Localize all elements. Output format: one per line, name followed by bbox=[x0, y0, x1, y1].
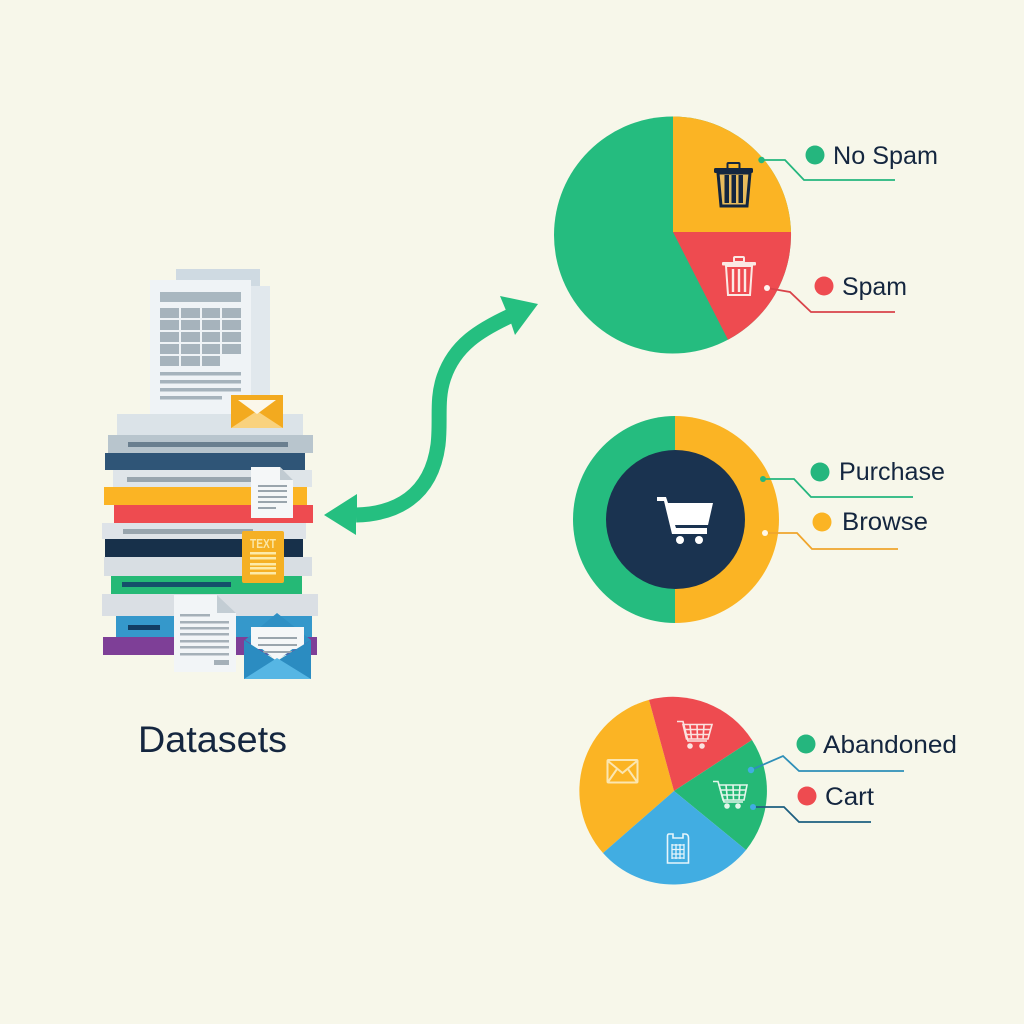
legend: Spam: Spam bbox=[842, 273, 907, 301]
leader: Cart bbox=[750, 804, 871, 822]
icon: TEXT tag bbox=[242, 531, 284, 583]
illustration: stack of datasets bbox=[102, 269, 318, 679]
legend: Cart: Cart bbox=[825, 783, 874, 811]
icon: dark trash can bbox=[714, 163, 753, 206]
book stack bbox=[102, 414, 318, 655]
leader: Spam bbox=[764, 285, 895, 312]
icon: TEXT tag: TEXT bbox=[250, 536, 276, 551]
icon: stacked paper sheets with table bbox=[150, 269, 270, 415]
panel: spam pie chart bbox=[554, 116, 938, 354]
legend: Purchase: Purchase bbox=[839, 458, 945, 486]
slice: red bbox=[649, 697, 752, 791]
icon: envelope outline bbox=[608, 760, 638, 782]
ring: green half bbox=[573, 416, 675, 623]
leader: No Spam bbox=[758, 157, 895, 180]
slice: green bbox=[554, 116, 791, 354]
panel: purchase donut chart bbox=[573, 416, 945, 623]
slice: blue bbox=[603, 791, 746, 885]
leader: Abandoned bbox=[748, 756, 904, 773]
icon: white trash can bbox=[722, 257, 756, 295]
icon: red slice cart bbox=[677, 722, 712, 748]
legend: Abandoned: Abandoned bbox=[823, 731, 957, 759]
leader: Browse bbox=[762, 530, 898, 549]
slice: green bbox=[674, 740, 767, 850]
icon: green slice cart bbox=[713, 782, 747, 808]
icon: yellow envelope bbox=[231, 395, 283, 428]
icon: small document bbox=[251, 467, 293, 518]
panel: four-slice pie chart bbox=[579, 697, 957, 885]
slice: red bbox=[673, 232, 791, 340]
arrow: two-way curved arrow bbox=[324, 296, 538, 535]
icon: blue open envelope bbox=[244, 613, 311, 679]
icon: white shopping cart bbox=[657, 497, 713, 544]
legend: Cart bbox=[798, 783, 874, 811]
slice: yellow bbox=[579, 700, 674, 853]
ring: yellow half bbox=[675, 416, 779, 623]
legend: No Spam: No Spam bbox=[833, 142, 938, 170]
heading: Datasets: Datasets bbox=[138, 719, 287, 760]
leader: Purchase bbox=[760, 476, 913, 497]
legend: Browse: Browse bbox=[842, 508, 928, 536]
icon: document with grid bbox=[668, 834, 688, 863]
slice: yellow bbox=[673, 116, 791, 232]
icon: large document bbox=[174, 595, 236, 672]
centre disc bbox=[606, 450, 745, 589]
